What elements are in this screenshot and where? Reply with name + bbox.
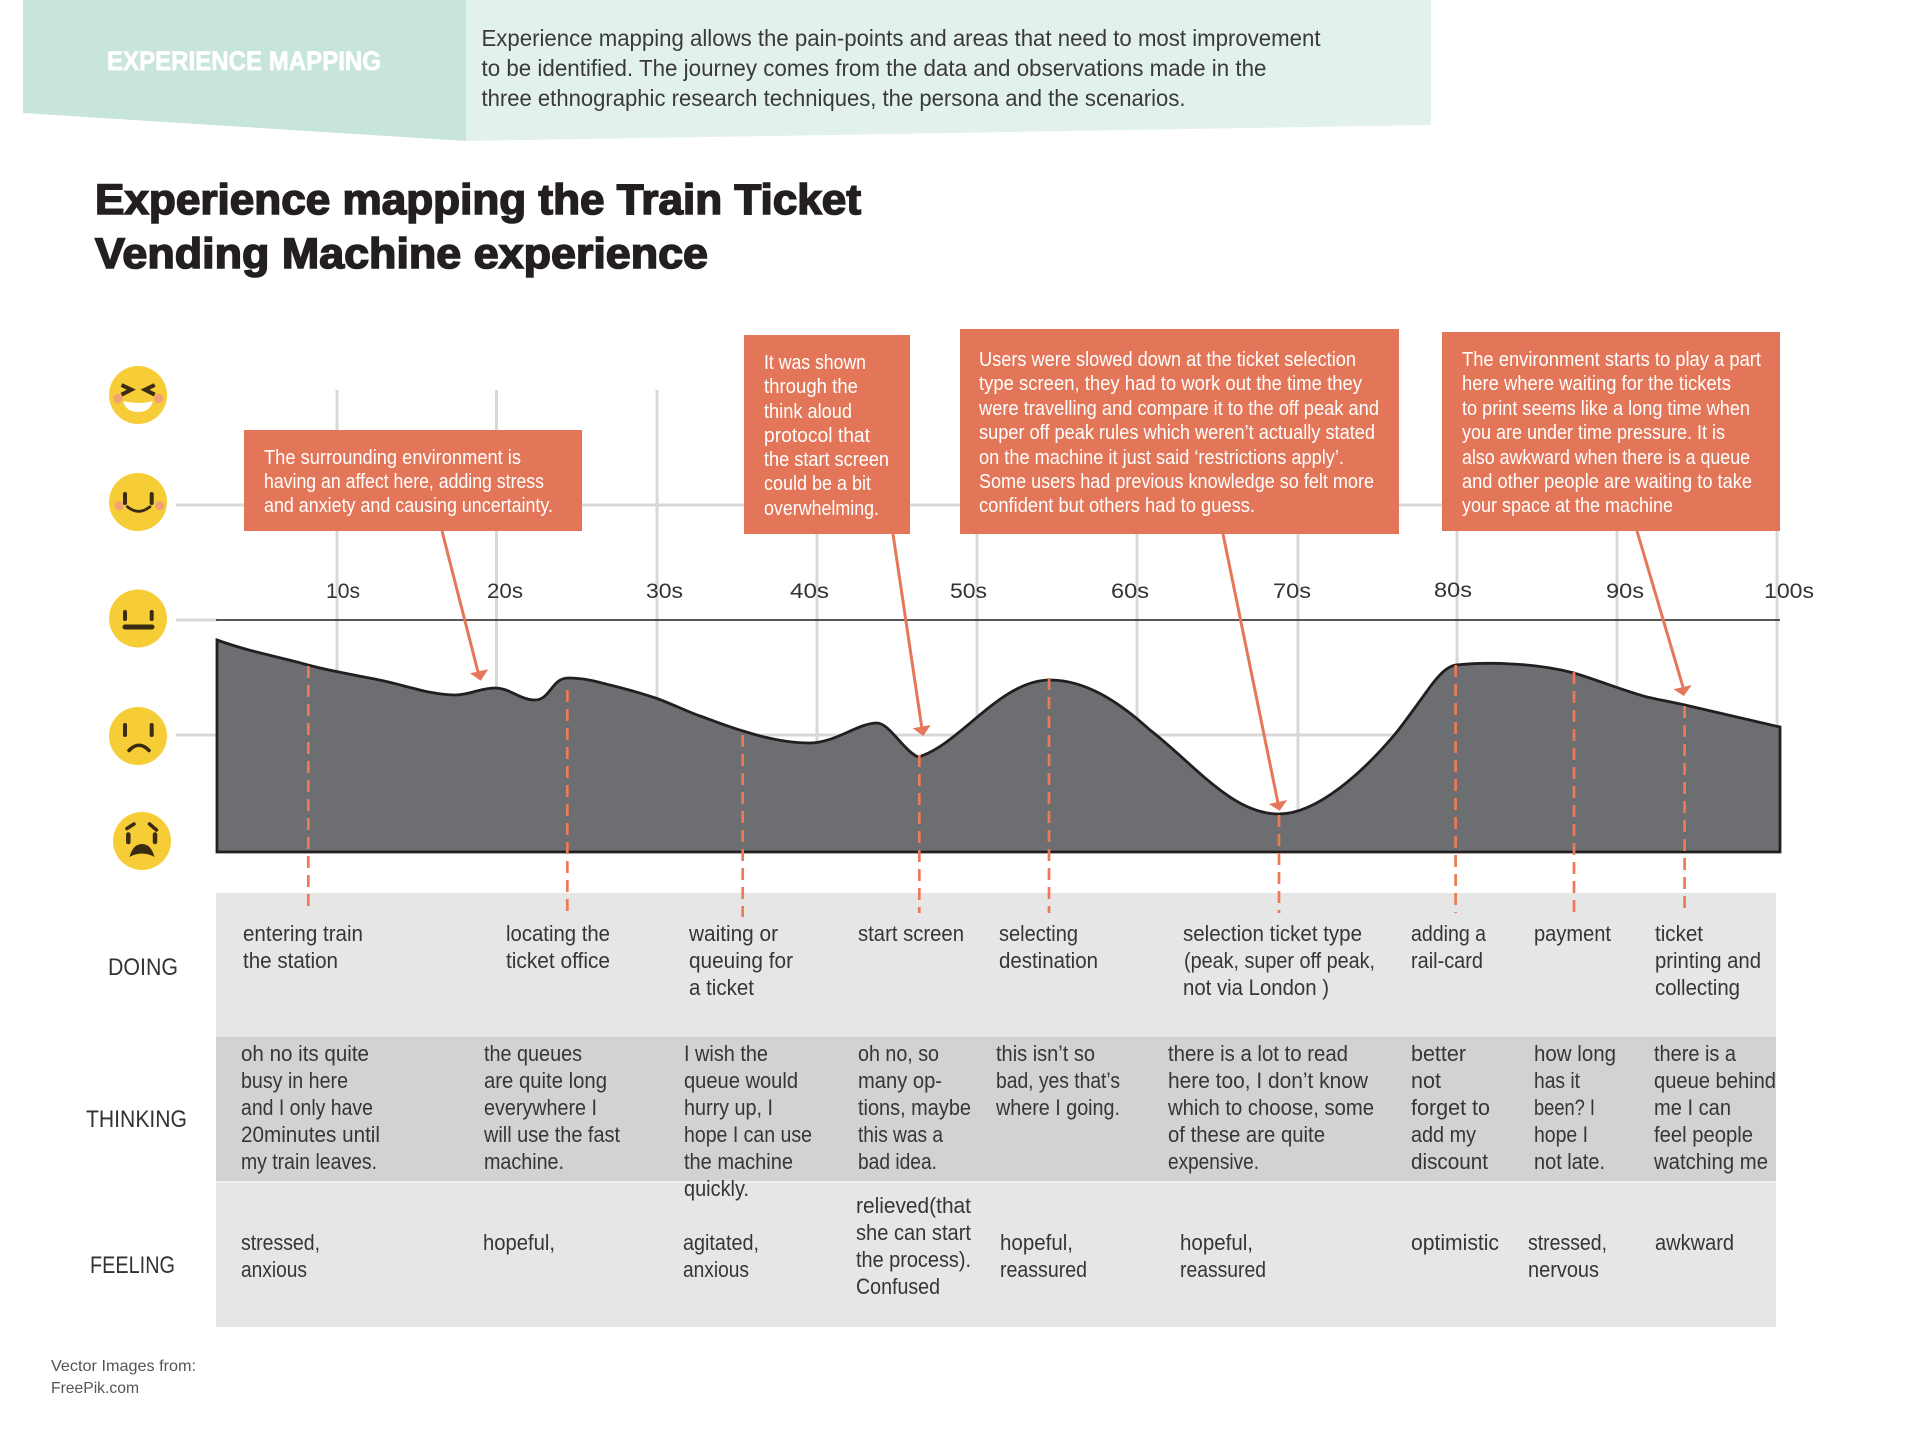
callout: start screen overwhelming: the start screen <box>764 449 889 471</box>
feeling row text: hopeful, <box>1000 1230 1073 1255</box>
header band <box>23 0 1431 141</box>
feeling row text: stressed, <box>241 1230 320 1255</box>
doing row text: entering train <box>243 921 363 946</box>
doing row text: a ticket <box>689 975 755 1000</box>
time tick labels: 100s <box>1764 580 1814 603</box>
callout: surrounding environment <box>244 430 582 531</box>
thinking row text: hurry up, I <box>684 1095 773 1120</box>
thinking row text: hope I <box>1534 1122 1588 1147</box>
doing row text: destination <box>999 948 1098 973</box>
thinking row text: this isn’t so <box>996 1041 1095 1066</box>
callout: ticket selection slowed users: were travelling and compare it to the off peak and <box>978 398 1379 420</box>
icon: neutral face <box>109 590 167 648</box>
callout: start screen overwhelming: think aloud <box>764 401 852 423</box>
thinking row text <box>241 1041 1776 1201</box>
time tick labels: 50s <box>950 580 987 603</box>
thinking row text: not late. <box>1534 1149 1605 1174</box>
thinking row text: everywhere I <box>484 1095 597 1120</box>
thinking row text: me I can <box>1654 1095 1731 1120</box>
feeling row text: stressed, <box>1528 1230 1607 1255</box>
callout: ticket selection slowed users: super off peak rules which weren’t actually stated <box>979 422 1375 444</box>
thinking row text: been? I <box>1534 1095 1595 1120</box>
feeling row text: reassured <box>1180 1257 1266 1282</box>
time tick labels: 60s <box>1111 580 1149 603</box>
callout: ticket selection slowed users: on the machine it just said ‘restrictions apply’. <box>979 447 1344 469</box>
thinking row text: my train leaves. <box>241 1149 377 1174</box>
thinking row text: bad idea. <box>858 1149 937 1174</box>
doing row text: (peak, super off peak, <box>1184 948 1375 973</box>
title: Vending Machine experience <box>95 230 708 278</box>
thinking row text: has it <box>1534 1068 1581 1093</box>
callout: start screen overwhelming: protocol that <box>764 425 870 447</box>
row label: feeling: FEELING <box>90 1252 175 1279</box>
title <box>95 176 861 278</box>
row separator <box>216 1181 1776 1183</box>
icon: crying face <box>113 812 171 870</box>
thinking row text: there is a lot to read <box>1168 1041 1348 1066</box>
feeling row text: the process). <box>856 1247 971 1272</box>
thinking row text: oh no its quite <box>241 1041 369 1066</box>
time tick labels: 20s <box>487 580 523 603</box>
emotion scale icons <box>109 366 171 870</box>
doing row text: locating the <box>506 921 610 946</box>
arrow: ticket selection callout to curve <box>1223 534 1287 811</box>
intro text: to be identified. The journey comes from the data and observations made in the <box>482 55 1266 81</box>
callout: ticket selection slowed users: Some users had previous knowledge so felt more <box>979 471 1374 493</box>
callout: surrounding environment: and anxiety and causing uncertainty. <box>264 495 553 517</box>
feeling row text: nervous <box>1528 1257 1599 1282</box>
title: Experience mapping the Train Ticket <box>95 176 861 224</box>
icon: sad face <box>109 707 167 765</box>
row label: thinking: THINKING <box>86 1106 187 1133</box>
callout: environment and time pressure: also awkward when there is a queue <box>1462 447 1750 469</box>
thinking row text: busy in here <box>241 1068 348 1093</box>
feeling row text: agitated, <box>683 1230 759 1255</box>
thinking row text: there is a <box>1654 1041 1736 1066</box>
doing row text: waiting or <box>688 921 778 946</box>
thinking row text: here too, I don’t know <box>1168 1068 1369 1093</box>
dashed step connectors <box>308 665 1685 917</box>
doing row text: selection ticket type <box>1183 921 1362 946</box>
thinking row text: feel people <box>1654 1122 1753 1147</box>
thinking row text: I wish the <box>684 1041 768 1066</box>
callout: environment and time pressure: your space at the machine <box>1462 495 1673 517</box>
callout: start screen overwhelming: It was shown <box>764 352 866 374</box>
thinking row text: quickly. <box>684 1176 749 1201</box>
thinking row text: hope I can use <box>684 1122 812 1147</box>
arrow: start screen callout to curve <box>893 534 931 736</box>
thinking row text: add my <box>1411 1122 1477 1147</box>
callout: ticket selection slowed users: Users were slowed down at the ticket selection <box>979 349 1356 371</box>
arrow: environment callout to curve <box>442 531 488 681</box>
row: thinking background <box>216 1037 1776 1181</box>
thinking row text: this was a <box>858 1122 943 1147</box>
time tick labels: 80s <box>1434 579 1472 602</box>
thinking row text: of these are quite <box>1168 1122 1325 1147</box>
doing row text: adding a <box>1411 921 1486 946</box>
experience area curve <box>217 640 1780 852</box>
feeling row text: Confused <box>856 1274 940 1299</box>
intro text: Experience mapping allows the pain-points and areas that need to most improvement <box>482 25 1321 51</box>
time tick labels <box>326 579 1814 603</box>
header label panel <box>23 0 466 141</box>
callout: environment and time pressure <box>1442 332 1780 531</box>
footer credit: FreePik.com <box>51 1380 139 1397</box>
header label: EXPERIENCE MAPPING <box>107 46 381 76</box>
thinking row text: many op- <box>858 1068 942 1093</box>
feeling row text: reassured <box>1000 1257 1087 1282</box>
doing row text: rail-card <box>1411 948 1483 973</box>
time tick labels: 10s <box>326 580 360 603</box>
doing row text: start screen <box>858 921 964 946</box>
thinking row text: queue would <box>684 1068 798 1093</box>
callout: start screen overwhelming: overwhelming. <box>764 498 879 520</box>
feeling row text: anxious <box>241 1257 307 1282</box>
intro text <box>482 25 1321 111</box>
callout: environment and time pressure: The environment starts to play a part <box>1462 349 1761 371</box>
thinking row text: watching me <box>1653 1149 1768 1174</box>
table rows <box>216 893 1776 1327</box>
time tick labels: 70s <box>1273 580 1311 603</box>
feeling row text: she can start <box>856 1220 972 1245</box>
thinking row text: queue behind <box>1654 1068 1776 1093</box>
time tick labels: 30s <box>646 580 683 603</box>
thinking row text: oh no, so <box>858 1041 939 1066</box>
callout: start screen overwhelming: could be a bit <box>764 473 871 495</box>
time tick labels: 40s <box>790 580 829 603</box>
doing row text: ticket office <box>506 948 610 973</box>
thinking row text: and I only have <box>241 1095 373 1120</box>
callout: surrounding environment: having an affect here, adding stress <box>264 471 544 493</box>
intro text: three ethnographic research techniques, the persona and the scenarios. <box>482 85 1186 111</box>
row label: doing: DOING <box>108 954 178 981</box>
thinking row text: the machine <box>684 1149 793 1174</box>
callout: start screen overwhelming: through the <box>764 376 858 398</box>
feeling row text: hopeful, <box>483 1230 555 1255</box>
callout: ticket selection slowed users <box>960 329 1399 534</box>
thinking row text: where I going. <box>995 1095 1120 1120</box>
doing row text <box>243 921 1761 1000</box>
callout: environment and time pressure: here where waiting for the tickets <box>1462 373 1731 395</box>
callout: environment and time pressure: and other people are waiting to take <box>1462 471 1752 493</box>
thinking row text: machine. <box>484 1149 564 1174</box>
row: feeling background <box>216 1181 1776 1327</box>
thinking row text: discount <box>1411 1149 1489 1174</box>
doing row text: collecting <box>1655 975 1740 1000</box>
feeling row text: awkward <box>1655 1230 1734 1255</box>
doing row text: printing and <box>1655 948 1761 973</box>
thinking row text: 20minutes until <box>241 1122 380 1147</box>
callout: ticket selection slowed users: confident but others had to guess. <box>979 495 1255 517</box>
footer credit <box>51 1358 196 1397</box>
thinking row text: tions, maybe <box>858 1095 971 1120</box>
callout: ticket selection slowed users: type screen, they had to work out the time they <box>979 373 1362 395</box>
thinking row text: which to choose, some <box>1167 1095 1374 1120</box>
feeling row text: optimistic <box>1411 1230 1499 1255</box>
thinking row text: forget to <box>1411 1095 1490 1120</box>
callout: environment and time pressure: you are under time pressure. It is <box>1462 422 1725 444</box>
thinking row text: will use the fast <box>483 1122 621 1147</box>
feeling row text <box>241 1193 1734 1299</box>
callout: start screen overwhelming <box>744 335 910 534</box>
row: doing background <box>216 893 1776 1037</box>
doing row text: the station <box>243 948 338 973</box>
icon: smiling face <box>109 473 167 531</box>
doing row text: selecting <box>999 921 1078 946</box>
doing row text: queuing for <box>689 948 793 973</box>
thinking row text: bad, yes that’s <box>996 1068 1120 1093</box>
timeline axis <box>216 619 1780 621</box>
feeling row text: relieved(that <box>856 1193 972 1218</box>
feeling row text: hopeful, <box>1180 1230 1253 1255</box>
feeling row text: anxious <box>683 1257 749 1282</box>
thinking row text: how long <box>1534 1041 1616 1066</box>
header intro panel <box>465 0 1431 141</box>
thinking row text: are quite long <box>484 1068 607 1093</box>
thinking row text: not <box>1411 1068 1442 1093</box>
footer credit: Vector Images from: <box>51 1358 196 1375</box>
doing row text: ticket <box>1655 921 1704 946</box>
doing row text: not via London ) <box>1183 975 1329 1000</box>
callout: surrounding environment: The surrounding environment is <box>264 447 521 469</box>
thinking row text: expensive. <box>1168 1149 1259 1174</box>
doing row text: payment <box>1534 921 1612 946</box>
callout: environment and time pressure: to print seems like a long time when <box>1462 398 1750 420</box>
arrow: environment callout to curve end <box>1637 531 1692 696</box>
icon: laughing face <box>109 366 167 424</box>
thinking row text: the queues <box>484 1041 582 1066</box>
thinking row text: better <box>1411 1041 1466 1066</box>
chart grid <box>176 390 1780 852</box>
time tick labels: 90s <box>1606 580 1644 603</box>
